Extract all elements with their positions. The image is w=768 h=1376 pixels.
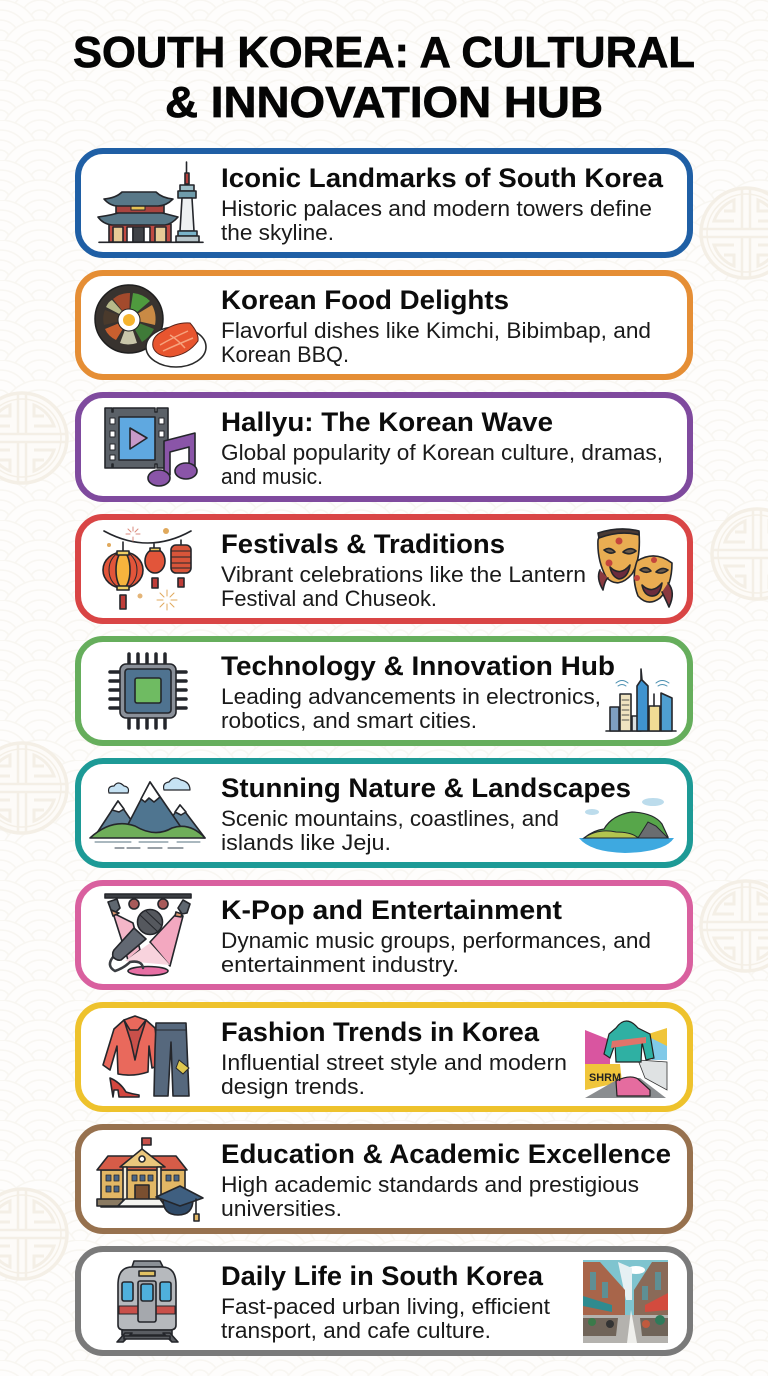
description <box>221 196 652 245</box>
heading: Stunning Nature & Landscapes <box>221 773 631 803</box>
heading: Hallyu: The Korean Wave <box>221 407 553 437</box>
icon: traditional masks <box>598 529 672 607</box>
description: robotics, and smart cities. <box>221 708 477 733</box>
description: Influential street style and modern <box>221 1050 567 1075</box>
heading: Education & Academic Excellence <box>221 1139 671 1169</box>
description: design trends. <box>221 1074 365 1099</box>
description: Leading advancements in electronics, <box>221 684 601 709</box>
panel: fashion <box>78 1005 690 1109</box>
title <box>73 28 695 127</box>
icon: blazer, jeans and heels <box>103 1016 189 1097</box>
heading: Fashion Trends in Korea <box>221 1017 540 1047</box>
panel: education <box>78 1127 690 1231</box>
icon: street fashion scene: SHRM <box>589 1072 621 1084</box>
decorative medallions <box>0 188 768 1279</box>
heading: Iconic Landmarks of South Korea <box>221 163 664 193</box>
icon: island <box>579 798 674 853</box>
panel: iconic landmarks <box>78 151 690 255</box>
description: universities. <box>221 1196 342 1221</box>
icon: palace and tower <box>98 162 203 242</box>
icon: train <box>117 1261 178 1342</box>
description: Korean BBQ. <box>221 342 349 367</box>
description: Fast-paced urban living, efficient <box>221 1294 551 1319</box>
description: Scenic mountains, coastlines, and <box>221 806 559 831</box>
heading: Technology & Innovation Hub <box>221 651 615 681</box>
heading: Korean Food Delights <box>221 285 509 315</box>
heading: Daily Life in South Korea <box>221 1261 544 1291</box>
description <box>221 440 663 489</box>
panel: technology <box>78 639 690 743</box>
description <box>221 1050 567 1099</box>
description: Vibrant celebrations like the Lantern <box>221 562 586 587</box>
heading: K-Pop and Entertainment <box>221 895 562 925</box>
title: SOUTH KOREA: A CULTURAL <box>73 28 695 77</box>
description <box>221 318 651 367</box>
description <box>221 684 601 733</box>
description <box>221 928 651 977</box>
panel: k-pop <box>78 883 690 987</box>
icon: mountains <box>90 778 205 848</box>
description <box>221 806 559 855</box>
panel: festivals <box>78 517 690 621</box>
panel: nature <box>78 761 690 865</box>
icon: street fashion scene <box>585 1016 667 1098</box>
description: Global popularity of Korean culture, dramas, <box>221 440 663 465</box>
description: entertainment industry. <box>221 952 459 977</box>
description: Historic palaces and modern towers define <box>221 196 652 221</box>
panel: hallyu <box>78 395 690 499</box>
title: & INNOVATION HUB <box>165 78 603 127</box>
icon: microchip <box>110 654 186 728</box>
description <box>221 1294 551 1343</box>
description <box>221 562 586 611</box>
description: Festival and Chuseok. <box>221 586 437 611</box>
panel: daily life <box>78 1249 690 1353</box>
description: and music. <box>221 464 323 489</box>
description: islands like Jeju. <box>221 830 391 855</box>
icon: lanterns <box>103 527 191 610</box>
icon: university and graduation cap <box>97 1138 203 1221</box>
icon: bibimbap and kimchi <box>95 285 206 367</box>
description: the skyline. <box>221 220 334 245</box>
icon: street cafe scene <box>583 1260 668 1343</box>
description: transport, and cafe culture. <box>221 1318 491 1343</box>
description: Flavorful dishes like Kimchi, Bibimbap, and <box>221 318 651 343</box>
icon: smart city <box>606 669 676 731</box>
icon: microphone and spotlights <box>105 894 191 976</box>
panel: korean food <box>78 273 690 377</box>
icon: film and music note <box>105 408 197 486</box>
description <box>221 1172 639 1221</box>
heading: Festivals & Traditions <box>221 529 505 559</box>
description: Dynamic music groups, performances, and <box>221 928 651 953</box>
description: High academic standards and prestigious <box>221 1172 639 1197</box>
